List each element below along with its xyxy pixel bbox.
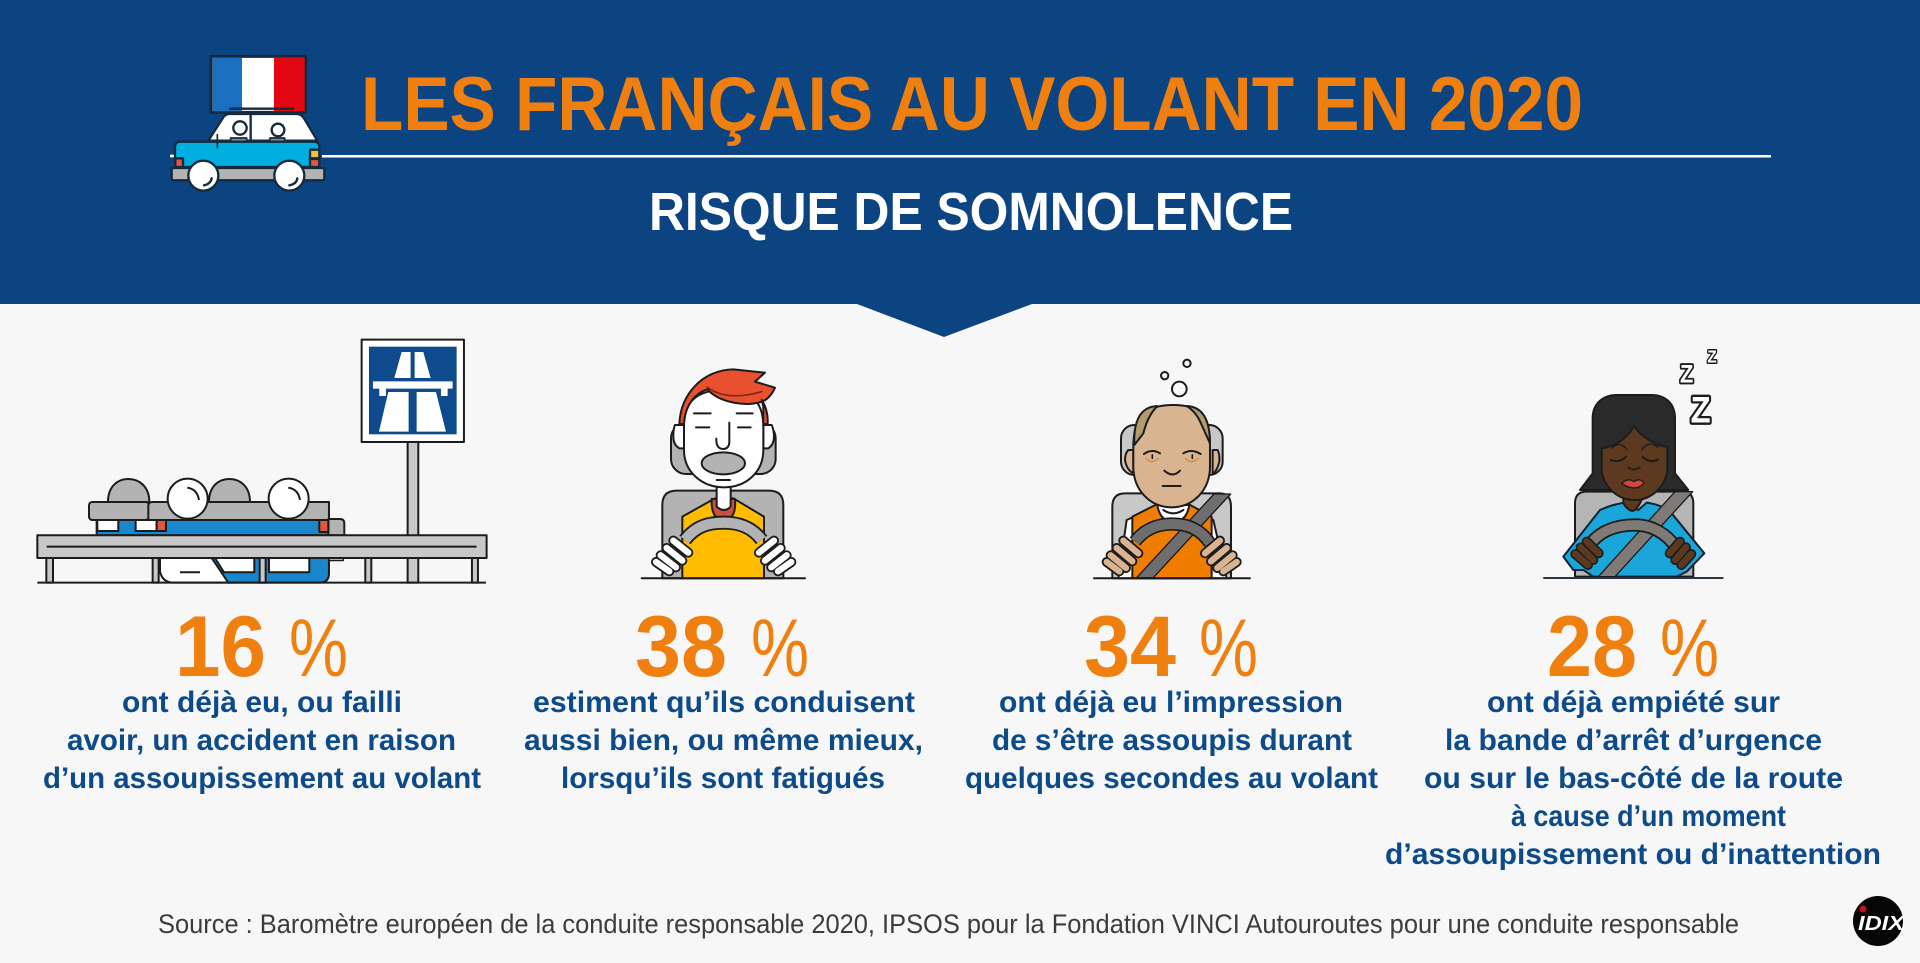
statistic 28 %: 28 — [1547, 599, 1637, 695]
text block: hard shoulder: ou sur le bas-côté de la route — [1424, 762, 1843, 795]
text block: accident: avoir, un accident en raison — [67, 724, 456, 757]
statistic 38 %: % — [751, 603, 809, 694]
text block: hard shoulder: la bande d’arrêt d’urgence — [1445, 724, 1822, 757]
icon: motorway sign and overturned car behind guardrail — [37, 340, 487, 583]
statistic 38 %: 38 — [635, 599, 727, 695]
statistic 34 %: % — [1199, 603, 1258, 694]
subtitle: RISQUE DE SOMNOLENCE — [649, 182, 1293, 242]
statistic 16 % — [175, 599, 348, 695]
text block: hard shoulder: à cause d’un moment — [1511, 800, 1786, 833]
text block: dozing off — [965, 686, 1378, 795]
text block: hard shoulder — [1385, 686, 1881, 871]
logo: IDIX — [1853, 896, 1906, 946]
statistic 16 %: % — [289, 603, 348, 694]
icon: red-haired driver — [642, 369, 805, 578]
statistic 28 %: % — [1660, 603, 1719, 694]
logo: IDIX: IDIX — [1858, 913, 1906, 935]
text block: dozing off: ont déjà eu l’impression — [999, 686, 1343, 719]
statistic 34 % — [1084, 599, 1258, 695]
source note: Source : Baromètre européen de la conduite responsable 2020, IPSOS pour la Fondation VINCI Autouroutes pour une conduite responsable — [158, 909, 1739, 939]
text block: dozing off: de s’être assoupis durant — [992, 724, 1352, 757]
statistic 34 %: 34 — [1084, 599, 1176, 695]
icon: sleeping woman driver: Z — [1680, 362, 1693, 389]
icon: balding driver with bubbles — [1094, 360, 1250, 578]
text block: accident — [43, 686, 481, 795]
text block: accident: ont déjà eu, ou failli — [122, 686, 402, 719]
title: LES FRANÇAIS AU VOLANT EN 2020 — [361, 62, 1583, 147]
icon: sleeping woman driver: Z — [1691, 390, 1711, 431]
icon: sleeping woman driver: Z — [1707, 347, 1717, 367]
panel: accident — [37, 340, 487, 795]
statistic 28 % — [1547, 599, 1719, 695]
text block: driving tired: lorsqu’ils sont fatigués — [561, 762, 885, 795]
text block: dozing off: quelques secondes au volant — [965, 762, 1378, 795]
panel: dozing off — [965, 360, 1378, 795]
text block: driving tired: estiment qu’ils conduisent — [533, 686, 915, 719]
statistic 38 % — [635, 599, 809, 695]
header banner — [0, 0, 1920, 337]
text block: hard shoulder: ont déjà empiété sur — [1487, 686, 1780, 719]
text block: accident: d’un assoupissement au volant — [43, 762, 481, 795]
text block: driving tired: aussi bien, ou même mieux, — [524, 724, 923, 757]
panel: driving tired — [524, 369, 923, 795]
text block: driving tired — [524, 686, 923, 795]
panel: hard shoulder — [1385, 347, 1881, 871]
statistic 16 %: 16 — [175, 599, 266, 695]
icon: car with French flag — [170, 56, 324, 191]
title rule — [322, 155, 1771, 158]
text block: hard shoulder: d’assoupissement ou d’inattention — [1385, 838, 1881, 871]
icon: sleeping woman driver — [1544, 347, 1723, 578]
